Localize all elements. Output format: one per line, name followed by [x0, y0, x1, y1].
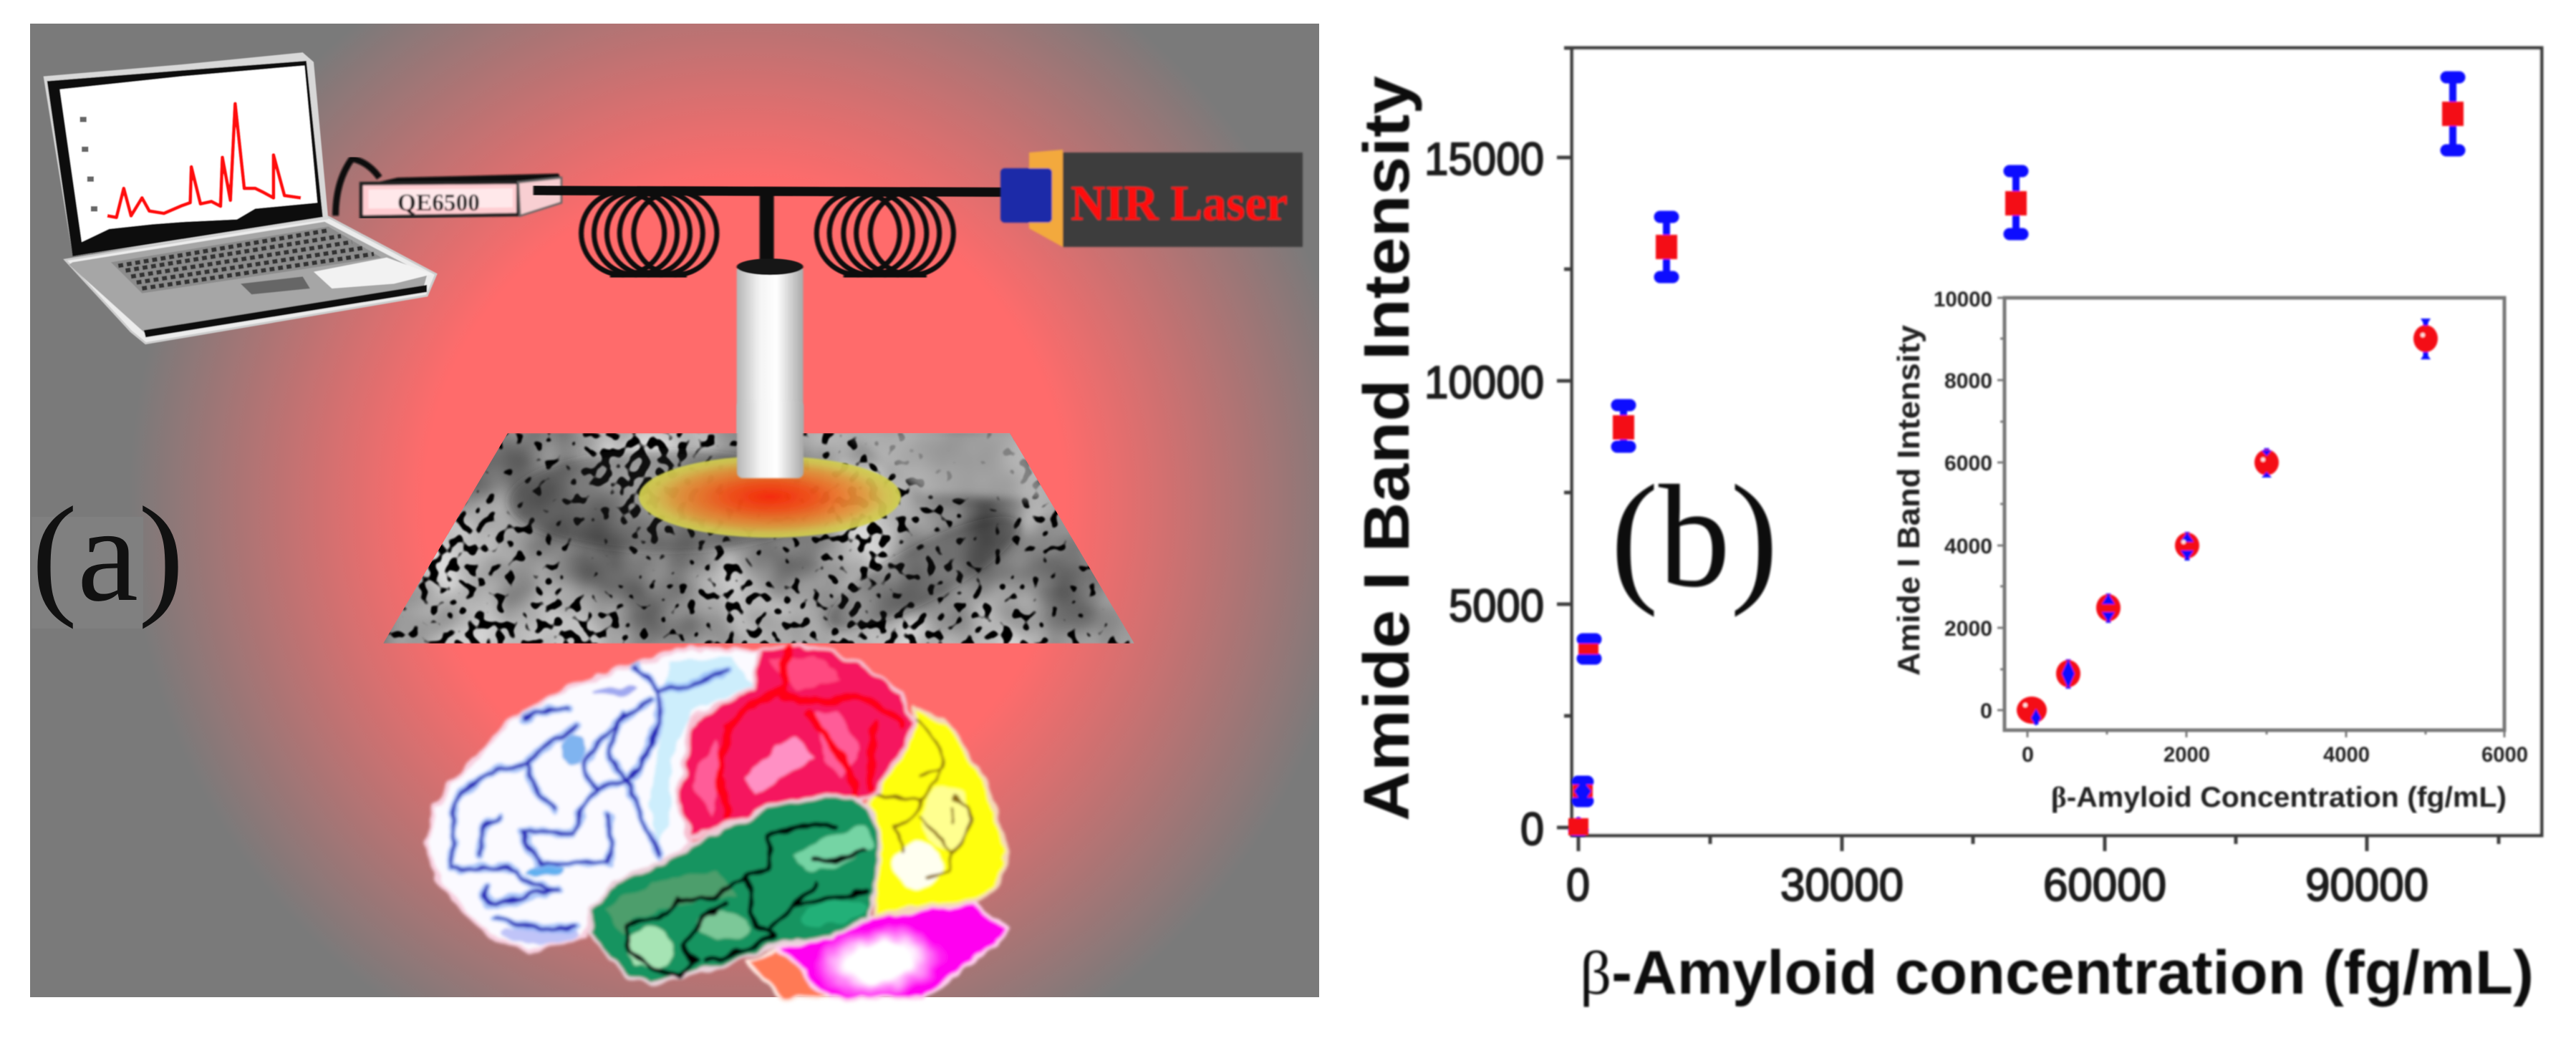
y axis tick labels: 15000 [1424, 133, 1544, 185]
inset y axis tick labels: 0 [1980, 699, 1992, 723]
temporal lobe [591, 795, 882, 984]
NIR laser source [1000, 150, 1303, 247]
x axis title: β-Amyloid concentration (fg/mL) [1580, 938, 2534, 1007]
icon: spectrometer QE6500 with cable [336, 158, 561, 217]
main data points with error bars [1568, 77, 2464, 835]
inset y axis tick labels: 4000 [1944, 535, 1992, 558]
inset frame and ticks [1997, 298, 2504, 737]
y axis title: Amide I Band Intensity [1351, 76, 1423, 821]
y axis tick labels [1424, 133, 1544, 855]
inset y axis tick labels: 10000 [1934, 288, 1992, 311]
inset x axis tick labels [2022, 743, 2528, 767]
left fibre coil [582, 191, 717, 275]
icon: laptop showing spectrum [44, 52, 436, 344]
occipital lobe [870, 704, 1007, 916]
icon: spectrometer QE6500 with cable: QE6500 [397, 190, 480, 216]
y axis tick labels: 0 [1520, 803, 1544, 855]
x axis tick labels: 30000 [1780, 859, 1904, 911]
inset x axis title: β-Amyloid Concentration (fg/mL) [2051, 781, 2507, 813]
right fibre coil [816, 191, 953, 275]
inset y axis tick labels: 6000 [1944, 452, 1992, 475]
y axis tick labels: 5000 [1449, 580, 1544, 631]
inset x axis tick labels: 6000 [2481, 743, 2528, 767]
parietal lobe [678, 647, 913, 839]
inset x axis tick labels: 4000 [2323, 743, 2370, 767]
inset x axis tick labels: 2000 [2163, 743, 2210, 767]
panel a: NIR Raman setup schematic [30, 24, 1319, 1014]
panel b: calibration chart [1351, 48, 2542, 1007]
fibre line [534, 190, 1007, 192]
panel label (a): (a) [32, 480, 184, 630]
y axis tick labels: 10000 [1424, 356, 1544, 408]
panel a background [30, 24, 1319, 997]
inset y axis tick labels: 2000 [1944, 617, 1992, 641]
probe cylinder [737, 258, 804, 479]
x axis tick labels: 60000 [2043, 859, 2166, 911]
inset chart [1891, 288, 2528, 813]
inset y axis title: Amide I Band Intensity [1891, 324, 1926, 676]
icon: brain with coloured lobes [427, 647, 1007, 1014]
panel label (b): (b) [1611, 455, 1778, 618]
inset x axis tick labels: 0 [2022, 743, 2034, 767]
NIR laser source: NIR Laser [1071, 176, 1288, 231]
optical fibre with coils and probe [534, 190, 1007, 479]
fibre stem [760, 194, 774, 262]
cerebellum [778, 905, 1007, 1014]
frontal lobe [427, 649, 760, 950]
x axis tick labels: 90000 [2305, 859, 2428, 911]
x axis tick labels [1566, 859, 2428, 911]
probe lower end over spot [737, 401, 804, 478]
inset y axis tick labels [1934, 288, 1992, 723]
chart frame and axis ticks [1557, 48, 2542, 851]
x axis tick labels: 0 [1566, 859, 1590, 911]
laser spot on tissue [639, 456, 901, 538]
inset y axis tick labels: 8000 [1944, 369, 1992, 393]
tissue section plane [383, 430, 1134, 649]
brain stem [746, 947, 834, 998]
inset data points [2017, 319, 2438, 726]
